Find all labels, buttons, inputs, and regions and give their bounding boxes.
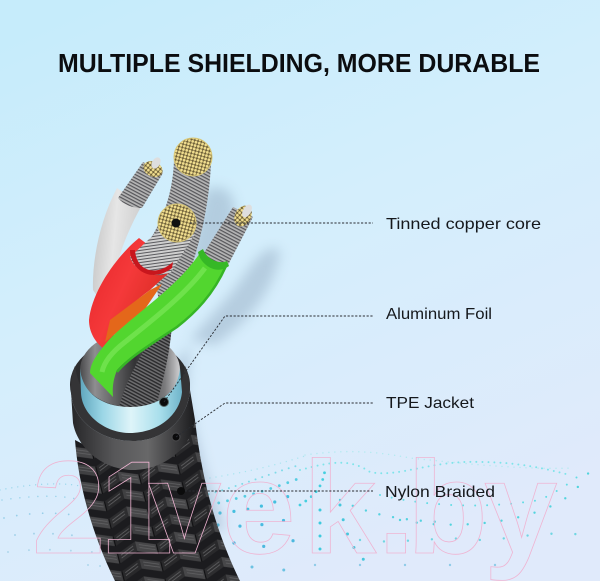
- label: TPE jacket: TPE Jacket: [386, 395, 475, 412]
- large rear strand lower section: [118, 325, 172, 410]
- green wire end rim: [198, 249, 229, 270]
- nylon marker dot: [177, 487, 185, 495]
- jacket rear edge: [70, 339, 190, 431]
- white wire metal strand: [118, 162, 163, 208]
- green insulated wire: [90, 253, 227, 397]
- jacket band: [71, 390, 195, 470]
- green wire metal strand: [202, 207, 253, 267]
- white insulated wire: [93, 188, 142, 300]
- green highlight: [102, 268, 205, 372]
- nylon braided sleeve: [75, 420, 240, 581]
- wire bundle illustration: [89, 138, 255, 410]
- middle strand: [130, 227, 195, 275]
- watermark 21vek.by: 21vek.by: [32, 434, 557, 581]
- leader lines: [164, 223, 373, 491]
- red wire end rim: [130, 250, 173, 275]
- cable shadows: [170, 187, 280, 530]
- label: nylon braided: Nylon Braided: [385, 484, 495, 501]
- large strand gold core: [174, 138, 212, 176]
- jacket marker dot: [172, 433, 180, 441]
- decorative dot wave pattern left: [0, 484, 105, 566]
- green wire tip ring: [231, 203, 255, 229]
- red insulated wire: [89, 238, 172, 348]
- title: MULTIPLE SHIELDING, MORE DURABLE: [58, 48, 540, 78]
- large rear strand: [150, 160, 211, 310]
- green shade: [117, 266, 226, 372]
- label: tinned copper core: Tinned copper core: [386, 216, 541, 233]
- jacket top ring: [71, 366, 190, 441]
- label: aluminum foil: Aluminum Foil: [386, 306, 492, 323]
- aluminum foil tube back wall: [80, 333, 180, 407]
- aluminum foil ring: [80, 368, 182, 433]
- middle strand gold core: [158, 204, 196, 242]
- orange inner shadow: [105, 284, 162, 342]
- TPE jacket: [71, 366, 195, 470]
- decorative dot wave pattern right: [202, 452, 590, 570]
- aluminum marker dot: [160, 398, 168, 406]
- white wire tip ring: [141, 156, 165, 180]
